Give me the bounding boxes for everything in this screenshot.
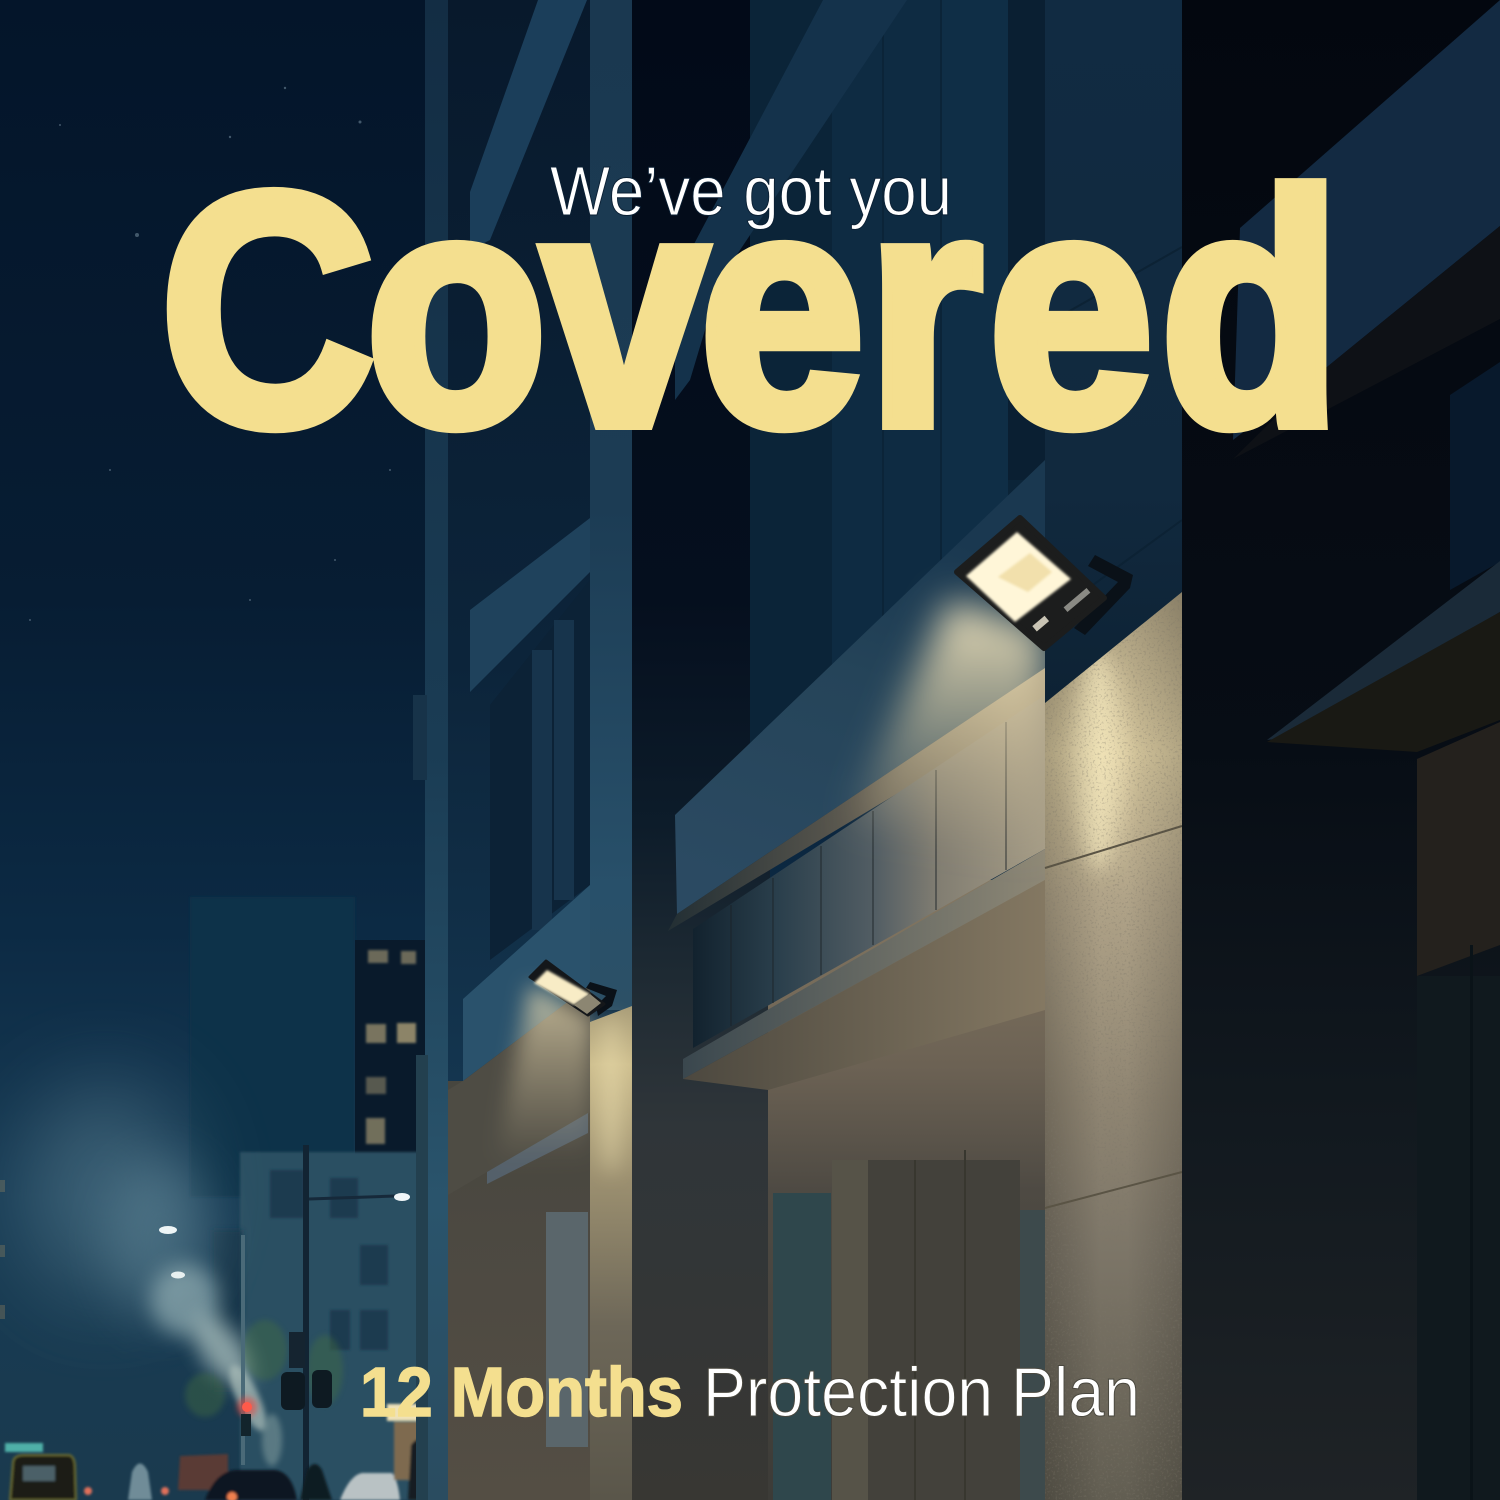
footer: protection plan: 12 Months: [360, 1353, 683, 1431]
building: thin left column: [413, 0, 448, 1500]
distant city buildings: [0, 897, 427, 1500]
icon: large floodlight: [957, 518, 1133, 648]
icon: small floodlight: [530, 961, 617, 1016]
building: right dark section: [1182, 0, 1500, 1500]
building: window band under slab: [693, 695, 1045, 1048]
title: Covered: [160, 124, 1342, 494]
stars: [29, 87, 391, 621]
building: lower ledge: [683, 849, 1045, 1079]
building: small column: [590, 0, 632, 1500]
building: upper left window bay: [448, 0, 590, 1100]
smoke plume: [25, 1085, 282, 1466]
light beam from large floodlight: [850, 600, 1045, 860]
subtitle: We’ve got you: [550, 152, 952, 230]
building: ground floor: [773, 1150, 1045, 1500]
tree: [185, 1320, 343, 1417]
footer: protection plan: Protection Plan: [703, 1353, 1140, 1431]
footer: protection plan: [360, 1353, 1140, 1431]
building: slab soffit: [668, 668, 1045, 931]
building: big lit column: [1045, 0, 1182, 1500]
street traffic: [5, 1404, 428, 1500]
street lamps and poles: [159, 1145, 410, 1500]
building: soffit under lower ledge: [683, 880, 1045, 1090]
building: lower left wall: [448, 985, 590, 1500]
light beam from small floodlight: [495, 985, 592, 1165]
building: dark column: [632, 0, 770, 1500]
building: upper windows: [675, 0, 1045, 760]
building: warm wall below ledge: [768, 880, 1045, 1500]
traffic lights: [237, 1332, 332, 1436]
building: large concrete slab: [675, 460, 1045, 914]
